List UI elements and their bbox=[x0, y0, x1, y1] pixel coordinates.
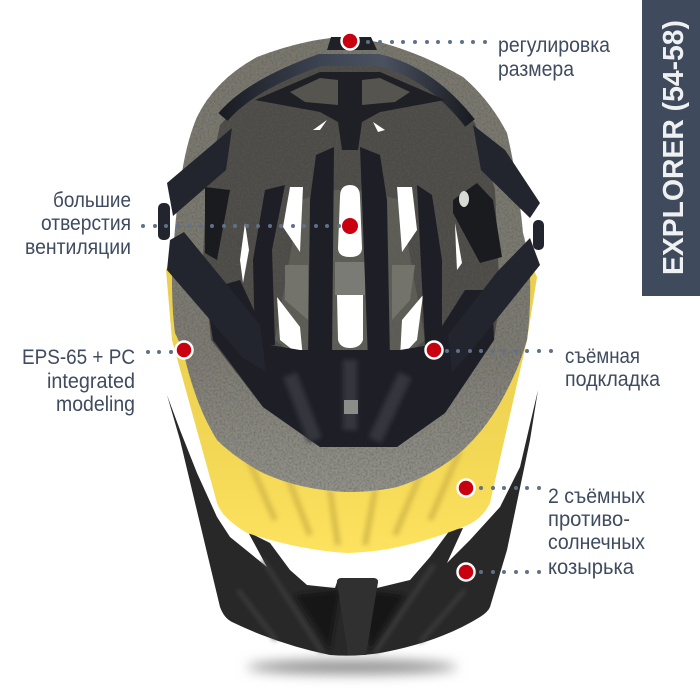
top retention band bbox=[223, 60, 470, 123]
dark foam interior bbox=[203, 65, 500, 447]
foam shell bbox=[172, 37, 530, 492]
liner ribs and pad bbox=[205, 147, 494, 447]
ground shadow bbox=[247, 660, 457, 674]
label: two removable visors bbox=[548, 485, 645, 579]
label: removable liner: съёмная bbox=[565, 345, 640, 368]
label: two removable visors: 2 съёмных bbox=[548, 485, 645, 508]
label: two removable visors: противо- bbox=[548, 508, 630, 531]
label: EPS-65 + PC: integrated bbox=[47, 370, 135, 393]
title panel: EXPLORER (54-58): EXPLORER (54-58) bbox=[658, 20, 690, 275]
black sun visor bbox=[167, 390, 538, 656]
label: size adjustment: размера bbox=[498, 58, 574, 81]
callout dotted leaders bbox=[141, 40, 553, 574]
label: ventilation holes bbox=[25, 189, 131, 259]
label: ventilation holes: отверстия bbox=[41, 212, 131, 235]
label: removable liner bbox=[565, 345, 660, 391]
label: ventilation holes: большие bbox=[53, 189, 131, 212]
label: ventilation holes: вентиляции bbox=[25, 236, 131, 259]
label: removable liner: подкладка bbox=[565, 368, 660, 391]
label: EPS-65 + PC bbox=[22, 346, 135, 416]
label: two removable visors: козырька bbox=[548, 556, 634, 579]
Y bracket bbox=[255, 72, 445, 150]
label: size adjustment: регулировка bbox=[498, 34, 610, 57]
vent mesh bbox=[344, 400, 358, 414]
title panel: EXPLORER (54-58) bbox=[642, 0, 700, 296]
label: two removable visors: солнечных bbox=[548, 531, 645, 554]
label: EPS-65 + PC: EPS-65 + PC bbox=[22, 346, 135, 369]
yellow sun visor bbox=[166, 200, 537, 553]
red callout markers bbox=[176, 32, 474, 580]
size adjuster bbox=[327, 37, 377, 50]
label: EPS-65 + PC: modeling bbox=[56, 393, 135, 416]
side pads bbox=[205, 183, 502, 263]
ventilation holes bbox=[240, 120, 462, 358]
head straps bbox=[158, 125, 544, 372]
lighter foam centre bbox=[275, 190, 425, 360]
label: size adjustment bbox=[498, 34, 610, 81]
helmet underside bbox=[158, 37, 544, 492]
